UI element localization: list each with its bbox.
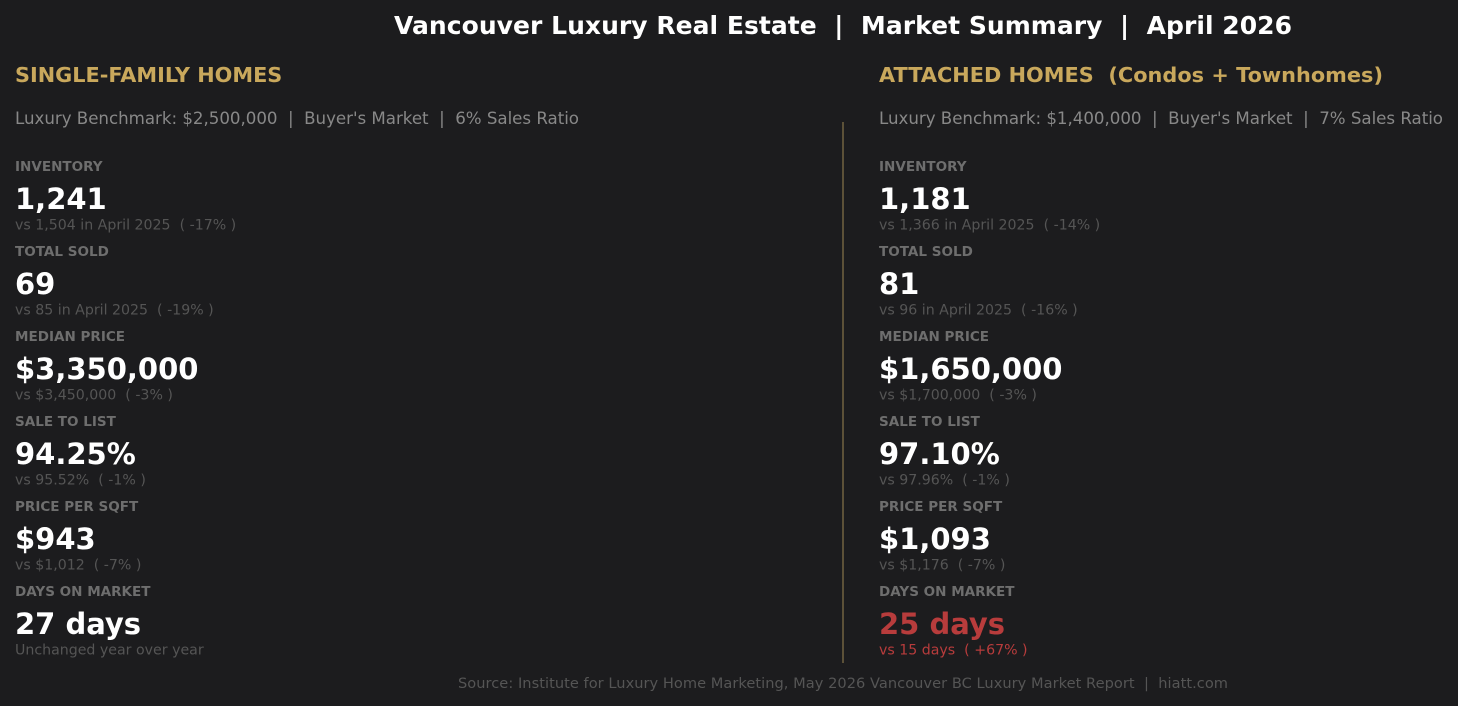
metric: price per sqft [879, 499, 1005, 574]
metric: sale to list: 94.25% [15, 437, 136, 471]
metric: total sold: TOTAL SOLD [879, 244, 973, 260]
metric: inventory [879, 159, 1100, 234]
metric: days on market (highlighted) [879, 584, 1028, 658]
metric: days on market (highlighted): DAYS ON MARKET [879, 584, 1015, 600]
metric: price per sqft: $943 [15, 522, 96, 556]
metric: median price [15, 329, 198, 404]
metric: price per sqft: PRICE PER SQFT [879, 499, 1003, 515]
metric: median price: MEDIAN PRICE [879, 329, 989, 345]
metric: total sold [15, 244, 214, 318]
metric: median price: vs $1,700,000 ( -3% ) [879, 388, 1037, 404]
metric: median price: vs $3,450,000 ( -3% ) [15, 388, 173, 404]
metric: price per sqft: vs $1,176 ( -7% ) [879, 558, 1005, 574]
metric: median price: $3,350,000 [15, 352, 198, 386]
metric: inventory: vs 1,504 in April 2025 ( -17% ) [15, 218, 236, 234]
metric: total sold: vs 96 in April 2025 ( -16% ) [879, 302, 1078, 318]
metric: days on market: Unchanged year over year [15, 642, 204, 658]
metric: days on market: 27 days [15, 607, 141, 641]
heading: attached homes: ATTACHED HOMES (Condos + Townhomes) [879, 63, 1383, 87]
benchmark line: attached: Luxury Benchmark: $1,400,000 | Buyer's Market | 7% Sales Ratio [879, 109, 1443, 128]
metric: sale to list: vs 97.96% ( -1% ) [879, 472, 1010, 488]
metric: price per sqft: $1,093 [879, 522, 991, 556]
metric: inventory: 1,181 [879, 182, 971, 216]
metric: total sold [879, 244, 1078, 318]
metric: sale to list: SALE TO LIST [15, 414, 117, 430]
metric: inventory: INVENTORY [879, 159, 967, 175]
metric: total sold: 81 [879, 267, 919, 301]
metric: total sold: vs 85 in April 2025 ( -19% ) [15, 302, 214, 318]
metric: price per sqft: PRICE PER SQFT [15, 499, 139, 515]
metric: total sold: 69 [15, 267, 55, 301]
metric: median price: $1,650,000 [879, 352, 1062, 386]
metric: inventory: INVENTORY [15, 159, 103, 175]
metric: price per sqft: vs $1,012 ( -7% ) [15, 558, 141, 574]
benchmark line: single-family: Luxury Benchmark: $2,500,000 | Buyer's Market | 6% Sales Ratio [15, 109, 579, 128]
metric: inventory: 1,241 [15, 182, 107, 216]
metric: inventory: vs 1,366 in April 2025 ( -14% ) [879, 218, 1100, 234]
panel: attached homes [879, 63, 1443, 658]
metric: sale to list: SALE TO LIST [879, 414, 981, 430]
heading: single-family homes: SINGLE-FAMILY HOMES [15, 63, 282, 87]
metric: median price [879, 329, 1062, 404]
panel: single-family homes [15, 63, 579, 658]
metric: sale to list [879, 414, 1010, 488]
metric: days on market (highlighted): 25 days [879, 607, 1005, 641]
metric: sale to list [15, 414, 146, 488]
metric: sale to list: 97.10% [879, 437, 1000, 471]
metric: days on market [15, 584, 204, 658]
title: Vancouver Luxury Real Estate | Market Summary | April 2026 [394, 11, 1292, 40]
metric: price per sqft [15, 499, 141, 574]
center divider [842, 122, 844, 663]
metric: days on market: DAYS ON MARKET [15, 584, 151, 600]
metric: median price: MEDIAN PRICE [15, 329, 125, 345]
source footer: Source: Institute for Luxury Home Marketing, May 2026 Vancouver BC Luxury Market Report | hiatt.com [458, 675, 1228, 692]
metric: sale to list: vs 95.52% ( -1% ) [15, 472, 146, 488]
metric: total sold: TOTAL SOLD [15, 244, 109, 260]
metric: inventory [15, 159, 236, 234]
metric: days on market (highlighted): vs 15 days ( +67% ) [879, 642, 1028, 658]
